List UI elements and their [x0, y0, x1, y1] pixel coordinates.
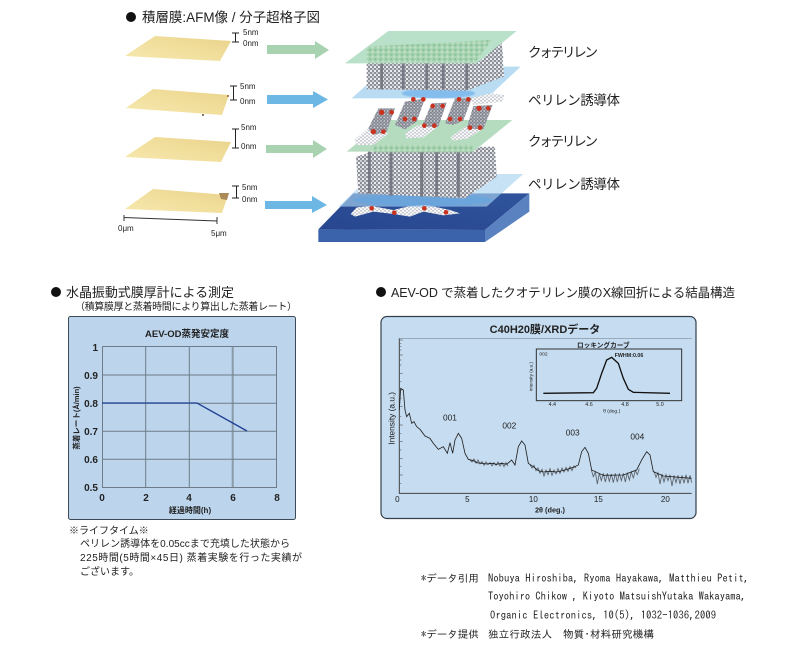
line chart: 0.5 — [84, 483, 98, 494]
plane: blue 1 — [352, 67, 521, 98]
line chart: 経過時間(h) — [169, 505, 211, 515]
citation block: Organic Electronics, 10(5), 1032-1036,2009 — [490, 610, 716, 621]
height scale 1: 0nm — [243, 39, 259, 48]
height scale 4: 5nm — [242, 183, 258, 192]
chart title: C40H20膜/XRDデータ — [490, 322, 600, 336]
arrow: blue 2 — [265, 196, 327, 213]
peak labels — [443, 413, 645, 442]
XRD axes: 15 — [594, 495, 603, 504]
inset: rocking curve: 4.8 — [621, 402, 629, 408]
note: lifetime: ございます。 — [80, 565, 139, 578]
XRD axes: Intensity (a.u.) — [386, 392, 396, 445]
inset: rocking curve: FWHM:0.06 — [615, 353, 643, 359]
heading: crystal oscillator measurement: 水晶振動式膜厚計による測定 — [66, 285, 234, 300]
citation block: 独立行政法人 物質･材料研究機構 — [488, 628, 654, 640]
width scale — [118, 215, 227, 238]
inset: rocking curve: Intensity (a.u.) — [529, 361, 534, 391]
peak labels: 004 — [630, 432, 645, 442]
peak labels: 002 — [502, 421, 517, 431]
diagram: molecular superlattice — [318, 31, 529, 242]
width scale: 0μm — [118, 224, 134, 233]
layer: bottom perylene on substrate — [351, 193, 493, 217]
XRD axes — [386, 338, 692, 515]
label: perylene derivative 2: ペリレン誘導体 — [528, 177, 620, 192]
height scale 2: 0nm — [240, 97, 256, 106]
inset: rocking curve: 5.0 — [656, 402, 664, 408]
height scale 1 — [232, 28, 259, 48]
height scale 2 — [230, 82, 256, 106]
panel: AFM images — [118, 28, 259, 238]
citation block — [421, 572, 749, 640]
inset: rocking curve: ロッキングカーブ — [577, 340, 630, 349]
label: quaterrylene 1: クォテリレン — [528, 45, 598, 60]
plane: green 2 — [347, 120, 512, 152]
AFM sheet 4 — [125, 189, 229, 213]
plane: green 1 — [345, 31, 517, 63]
width scale: 5μm — [211, 229, 227, 238]
citation block: Toyohiro Chikow , Kiyoto MatsuishYutaka Wakayama, — [488, 592, 746, 602]
line chart: 2 — [143, 493, 149, 504]
arrow: green 1 — [267, 41, 329, 59]
chart title: AEV-OD蒸発安定度 — [145, 328, 229, 340]
line chart: 1 — [92, 343, 98, 354]
inset: rocking curve: θ (deg.) — [603, 409, 621, 415]
citation block: *データ引用 — [421, 572, 479, 584]
line chart: 0.8 — [84, 399, 98, 410]
note: lifetime: 225時間(5時間×45日) 蒸着実験を行った実績が — [80, 551, 302, 564]
heading: crystal oscillator measurement: （積算膜厚と蒸着時間により算出した蒸着レート） — [75, 300, 297, 313]
AFM sheet 1 — [125, 36, 231, 61]
citation block: *データ提供 — [421, 628, 479, 640]
inset: rocking curve: 4.6 — [585, 402, 593, 408]
line chart: 0.6 — [84, 455, 98, 466]
arrow: blue 1 — [267, 91, 328, 108]
height scale 4 — [232, 183, 258, 204]
heading: crystal oscillator measurement — [51, 285, 297, 313]
height scale 3 — [232, 123, 257, 151]
heading: laminated film: 積層膜:AFM像 / 分子超格子図 — [142, 10, 320, 25]
layer: perylene diagonal — [354, 88, 505, 145]
arrow: green 2 — [266, 140, 327, 158]
line chart: 0 — [99, 493, 105, 504]
peak labels: 001 — [443, 413, 457, 423]
line chart: 4 — [186, 493, 192, 504]
line chart — [71, 343, 280, 515]
line chart: 6 — [230, 493, 236, 504]
XRD axes: 2θ (deg.) — [535, 506, 566, 515]
line chart: 8 — [274, 493, 280, 504]
XRD axes: 0 — [395, 495, 400, 504]
height scale 1: 5nm — [243, 28, 259, 37]
XRD spectrum — [399, 388, 692, 478]
substrate — [318, 193, 529, 242]
line chart: 蒸着レート(Å/min) — [71, 386, 81, 450]
inset: rocking curve: 002 — [539, 351, 548, 357]
XRD axes: 5 — [465, 495, 470, 504]
heading: XRD crystal structure: AEV-OD で蒸着したクオテリレン膜のX線回折による結晶構造 — [391, 285, 735, 300]
inset: rocking curve — [529, 340, 682, 415]
note: lifetime: ペリレン誘導体を0.05ccまで充填した状態から — [80, 537, 290, 550]
AFM sheet 3 — [125, 137, 231, 162]
citation block: Nobuya Hiroshiba, Ryoma Hayakawa, Matthieu Petit, — [488, 574, 749, 584]
note: lifetime: ※ライフタイム※ — [69, 525, 149, 537]
label: quaterrylene 2: クォテリレン — [528, 134, 598, 149]
inset: rocking curve: 4.4 — [549, 402, 556, 408]
line chart: 0.7 — [84, 427, 98, 438]
panel: XRD chart — [381, 316, 696, 518]
XRD axes: 10 — [529, 495, 538, 504]
panel: evaporation stability chart — [68, 316, 296, 520]
label: perylene derivative 1: ペリレン誘導体 — [528, 93, 620, 108]
note: lifetime — [69, 525, 302, 578]
XRD axes: 20 — [661, 495, 670, 504]
height scale 4: 0nm — [242, 195, 258, 204]
height scale 3: 0nm — [241, 142, 257, 151]
height scale 2: 5nm — [240, 82, 256, 91]
line chart: 0.9 — [84, 371, 98, 382]
XRD noise — [470, 459, 692, 486]
layer: lower quaterrylene — [356, 147, 497, 198]
plane: blue 2 — [338, 174, 523, 207]
peak labels: 003 — [566, 427, 580, 437]
AFM sheet 2 — [126, 89, 229, 116]
layer: upper quaterrylene — [367, 43, 504, 91]
height scale 3: 5nm — [241, 123, 257, 132]
